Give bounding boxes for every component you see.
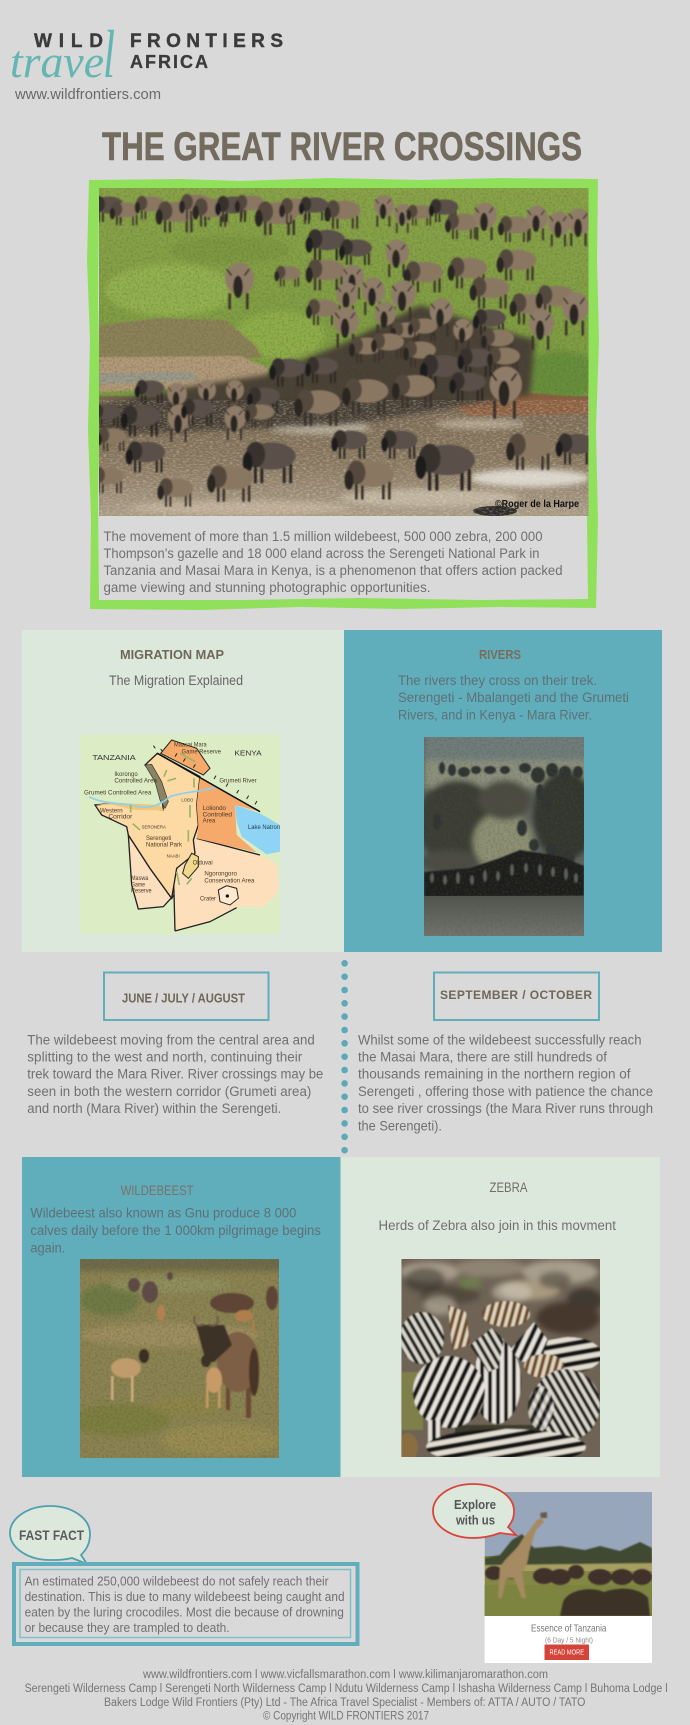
photo: zebra herd (398, 1259, 603, 1465)
logo: Wild Frontiers Travel Africa: FRONTIERS (130, 31, 283, 52)
tour name: Essence of Tanzania (531, 1622, 607, 1634)
wildebeest text: Wildebeest also known as Gnu produce 8 000 (30, 1206, 296, 1220)
map of the Serengeti and Masai Mara: Crater (200, 897, 216, 903)
footer text: © Copyright WILD FRONTIERS 2017 (263, 1710, 429, 1722)
heading: zebra: ZEBRA (490, 1180, 528, 1195)
map of the Serengeti and Masai Mara: KENYA (234, 749, 263, 758)
panel: rivers (344, 630, 662, 952)
september to october paragraph: thousands remaining in the northern region of (358, 1067, 631, 1082)
timeline: dotted divider (341, 960, 348, 1153)
map of the Serengeti and Masai Mara: Game Reserve (182, 749, 222, 755)
bubble: fast fact: FAST FACT (19, 1527, 84, 1543)
button: read more: READ MORE (550, 1650, 584, 1656)
map of the Serengeti and Masai Mara: LOBO (181, 798, 194, 803)
map of the Serengeti and Masai Mara: SERONERA (142, 824, 166, 829)
fast fact box: An estimated 250,000 wildebeest do not safely reach their (25, 1574, 329, 1588)
footer text: Bakers Lodge Wild Frontiers (Pty) Ltd - The Africa Travel Specialist - Members of: ATTA / AUTO / TATO (104, 1697, 585, 1709)
map of the Serengeti and Masai Mara: Olduvai (193, 860, 213, 866)
logo: Wild Frontiers Travel Africa: WILD (34, 31, 103, 52)
logo: Wild Frontiers Travel Africa: l (103, 16, 115, 92)
wildebeest text: again. (30, 1240, 65, 1256)
footer text (25, 1669, 668, 1722)
logo: Wild Frontiers Travel Africa: AFRICA (130, 52, 208, 72)
month box: September / October (434, 972, 599, 1020)
logo: Wild Frontiers Travel Africa (10, 16, 283, 92)
map of the Serengeti and Masai Mara: Conservation Area (204, 878, 255, 884)
map of the Serengeti and Masai Mara (80, 734, 280, 934)
september to october paragraph: the Serengeti). (358, 1118, 442, 1134)
map of the Serengeti and Masai Mara: Serengeti (146, 836, 171, 842)
intro paragraph: game viewing and stunning photographic opportunities. (104, 580, 430, 595)
month box: June / July / August (104, 972, 268, 1020)
map of the Serengeti and Masai Mara: Lake Natron (248, 825, 280, 831)
intro paragraph (104, 529, 562, 595)
map of the Serengeti and Masai Mara: Western (100, 808, 123, 814)
photo: herd descending a river bank (424, 737, 584, 936)
website address: www.wildfrontiers.com (14, 87, 161, 103)
map of the Serengeti and Masai Mara: NAABI (167, 854, 180, 859)
zebra text: Herds of Zebra also join in this movment (378, 1218, 616, 1233)
heading: wildebeest: WILDEBEEST (121, 1183, 194, 1198)
photo: wildebeest with calves (70, 1255, 285, 1458)
logo: Wild Frontiers Travel Africa: trave (10, 36, 104, 87)
panel: migration map (22, 630, 344, 952)
map of the Serengeti and Masai Mara: Game (131, 882, 146, 888)
month box: September / October: SEPTEMBER / OCTOBER (440, 988, 592, 1002)
panel: zebra (340, 1157, 660, 1477)
photo credit: ©Roger de la Harpe (495, 498, 579, 510)
map of the Serengeti and Masai Mara: National Park (146, 842, 182, 848)
september to october paragraph (358, 1032, 653, 1134)
bubble: explore with us: Explore (454, 1497, 496, 1512)
june to august paragraph: and north (Mara River) within the Serengeti. (27, 1101, 281, 1116)
fast fact box: or because they are trampled to death. (25, 1620, 230, 1635)
september to october paragraph: Serengeti , offering those with patience the chance (358, 1084, 653, 1099)
bubble: explore with us: with us (455, 1512, 495, 1528)
hero photo: wildebeest crossing the river (91, 188, 600, 516)
september to october paragraph: Whilst some of the wildebeest successfully reach (358, 1032, 642, 1048)
fast fact box: destination. This is due to many wildebeest being caught and (25, 1589, 345, 1604)
fast fact box: eaten by the luring crocodiles. Most die because of drowning (25, 1605, 344, 1620)
intro paragraph: The movement of more than 1.5 million wildebeest, 500 000 zebra, 200 000 (104, 529, 542, 544)
intro paragraph: Tanzania and Masai Mara in Kenya, is a phenomenon that offers action packed (104, 563, 562, 578)
map of the Serengeti and Masai Mara: Loliondo (203, 806, 227, 812)
wildebeest text: calves daily before the 1 000km pilgrimage begins (30, 1223, 321, 1238)
june to august paragraph: trek toward the Mara River. River crossings may be (27, 1067, 323, 1082)
month box: June / July / August: JUNE / JULY / AUGUST (122, 990, 245, 1006)
map of the Serengeti and Masai Mara: Area (203, 819, 216, 825)
map of the Serengeti and Masai Mara: Corridor (108, 814, 132, 820)
green rough frame (87, 178, 599, 610)
june to august paragraph: The wildebeest moving from the central area and (27, 1032, 315, 1048)
map of the Serengeti and Masai Mara: Maswa (131, 876, 149, 882)
button: read more (544, 1644, 589, 1660)
september to october paragraph: to see river crossings (the Mara River runs through (358, 1101, 653, 1116)
map of the Serengeti and Masai Mara: Grumeti Controlled Area (84, 790, 152, 796)
june to august paragraph (27, 1032, 323, 1116)
card: Essence of Tanzania tour (485, 1492, 652, 1663)
map of the Serengeti and Masai Mara: Grumeti River (219, 778, 257, 784)
rivers text (398, 673, 629, 722)
panel: hero with green frame (87, 178, 600, 610)
map of the Serengeti and Masai Mara: TANZANIA (92, 753, 137, 762)
june to august paragraph: splitting to the west and north, continuing their (27, 1050, 303, 1064)
subheading: the migration explained: The Migration Explained (109, 673, 243, 688)
bubble: fast fact (10, 1506, 90, 1564)
rivers text: Rivers, and in Kenya - Mara River. (398, 708, 592, 722)
bubble: explore with us (433, 1484, 516, 1538)
intro paragraph: Thompson’s gazelle and 18 000 eland across the Serengeti National Park in (104, 546, 540, 561)
rivers text: Serengeti - Mbalangeti and the Grumeti (398, 690, 629, 705)
map of the Serengeti and Masai Mara: Ikorongo (114, 772, 138, 778)
wildebeest text (30, 1206, 321, 1256)
photo: giraffe and wildebeest (485, 1492, 652, 1616)
map of the Serengeti and Masai Mara: Reserve (131, 889, 152, 895)
heading: rivers: RIVERS (479, 647, 521, 662)
rivers text: The rivers they cross on their trek. (398, 673, 597, 688)
map of the Serengeti and Masai Mara: Ngorongoro (204, 872, 238, 878)
footer text: www.wildfrontiers.com l www.vicfallsmarathon.com l www.kilimanjaromarathon.com (142, 1669, 548, 1681)
map of the Serengeti and Masai Mara: Controlled (203, 812, 232, 818)
panel: wildebeest (22, 1157, 340, 1477)
tour length: (6 Day / 5 Night) (545, 1636, 593, 1644)
heading: migration map: MIGRATION MAP (120, 647, 224, 662)
september to october paragraph: the Masai Mara, there are still hundreds of (358, 1050, 607, 1064)
fast fact box (14, 1564, 358, 1644)
map of the Serengeti and Masai Mara: Maasai Mara (174, 743, 207, 749)
map of the Serengeti and Masai Mara: Controlled Area (114, 779, 158, 785)
june to august paragraph: seen in both the western corridor (Grumeti area) (27, 1084, 311, 1099)
